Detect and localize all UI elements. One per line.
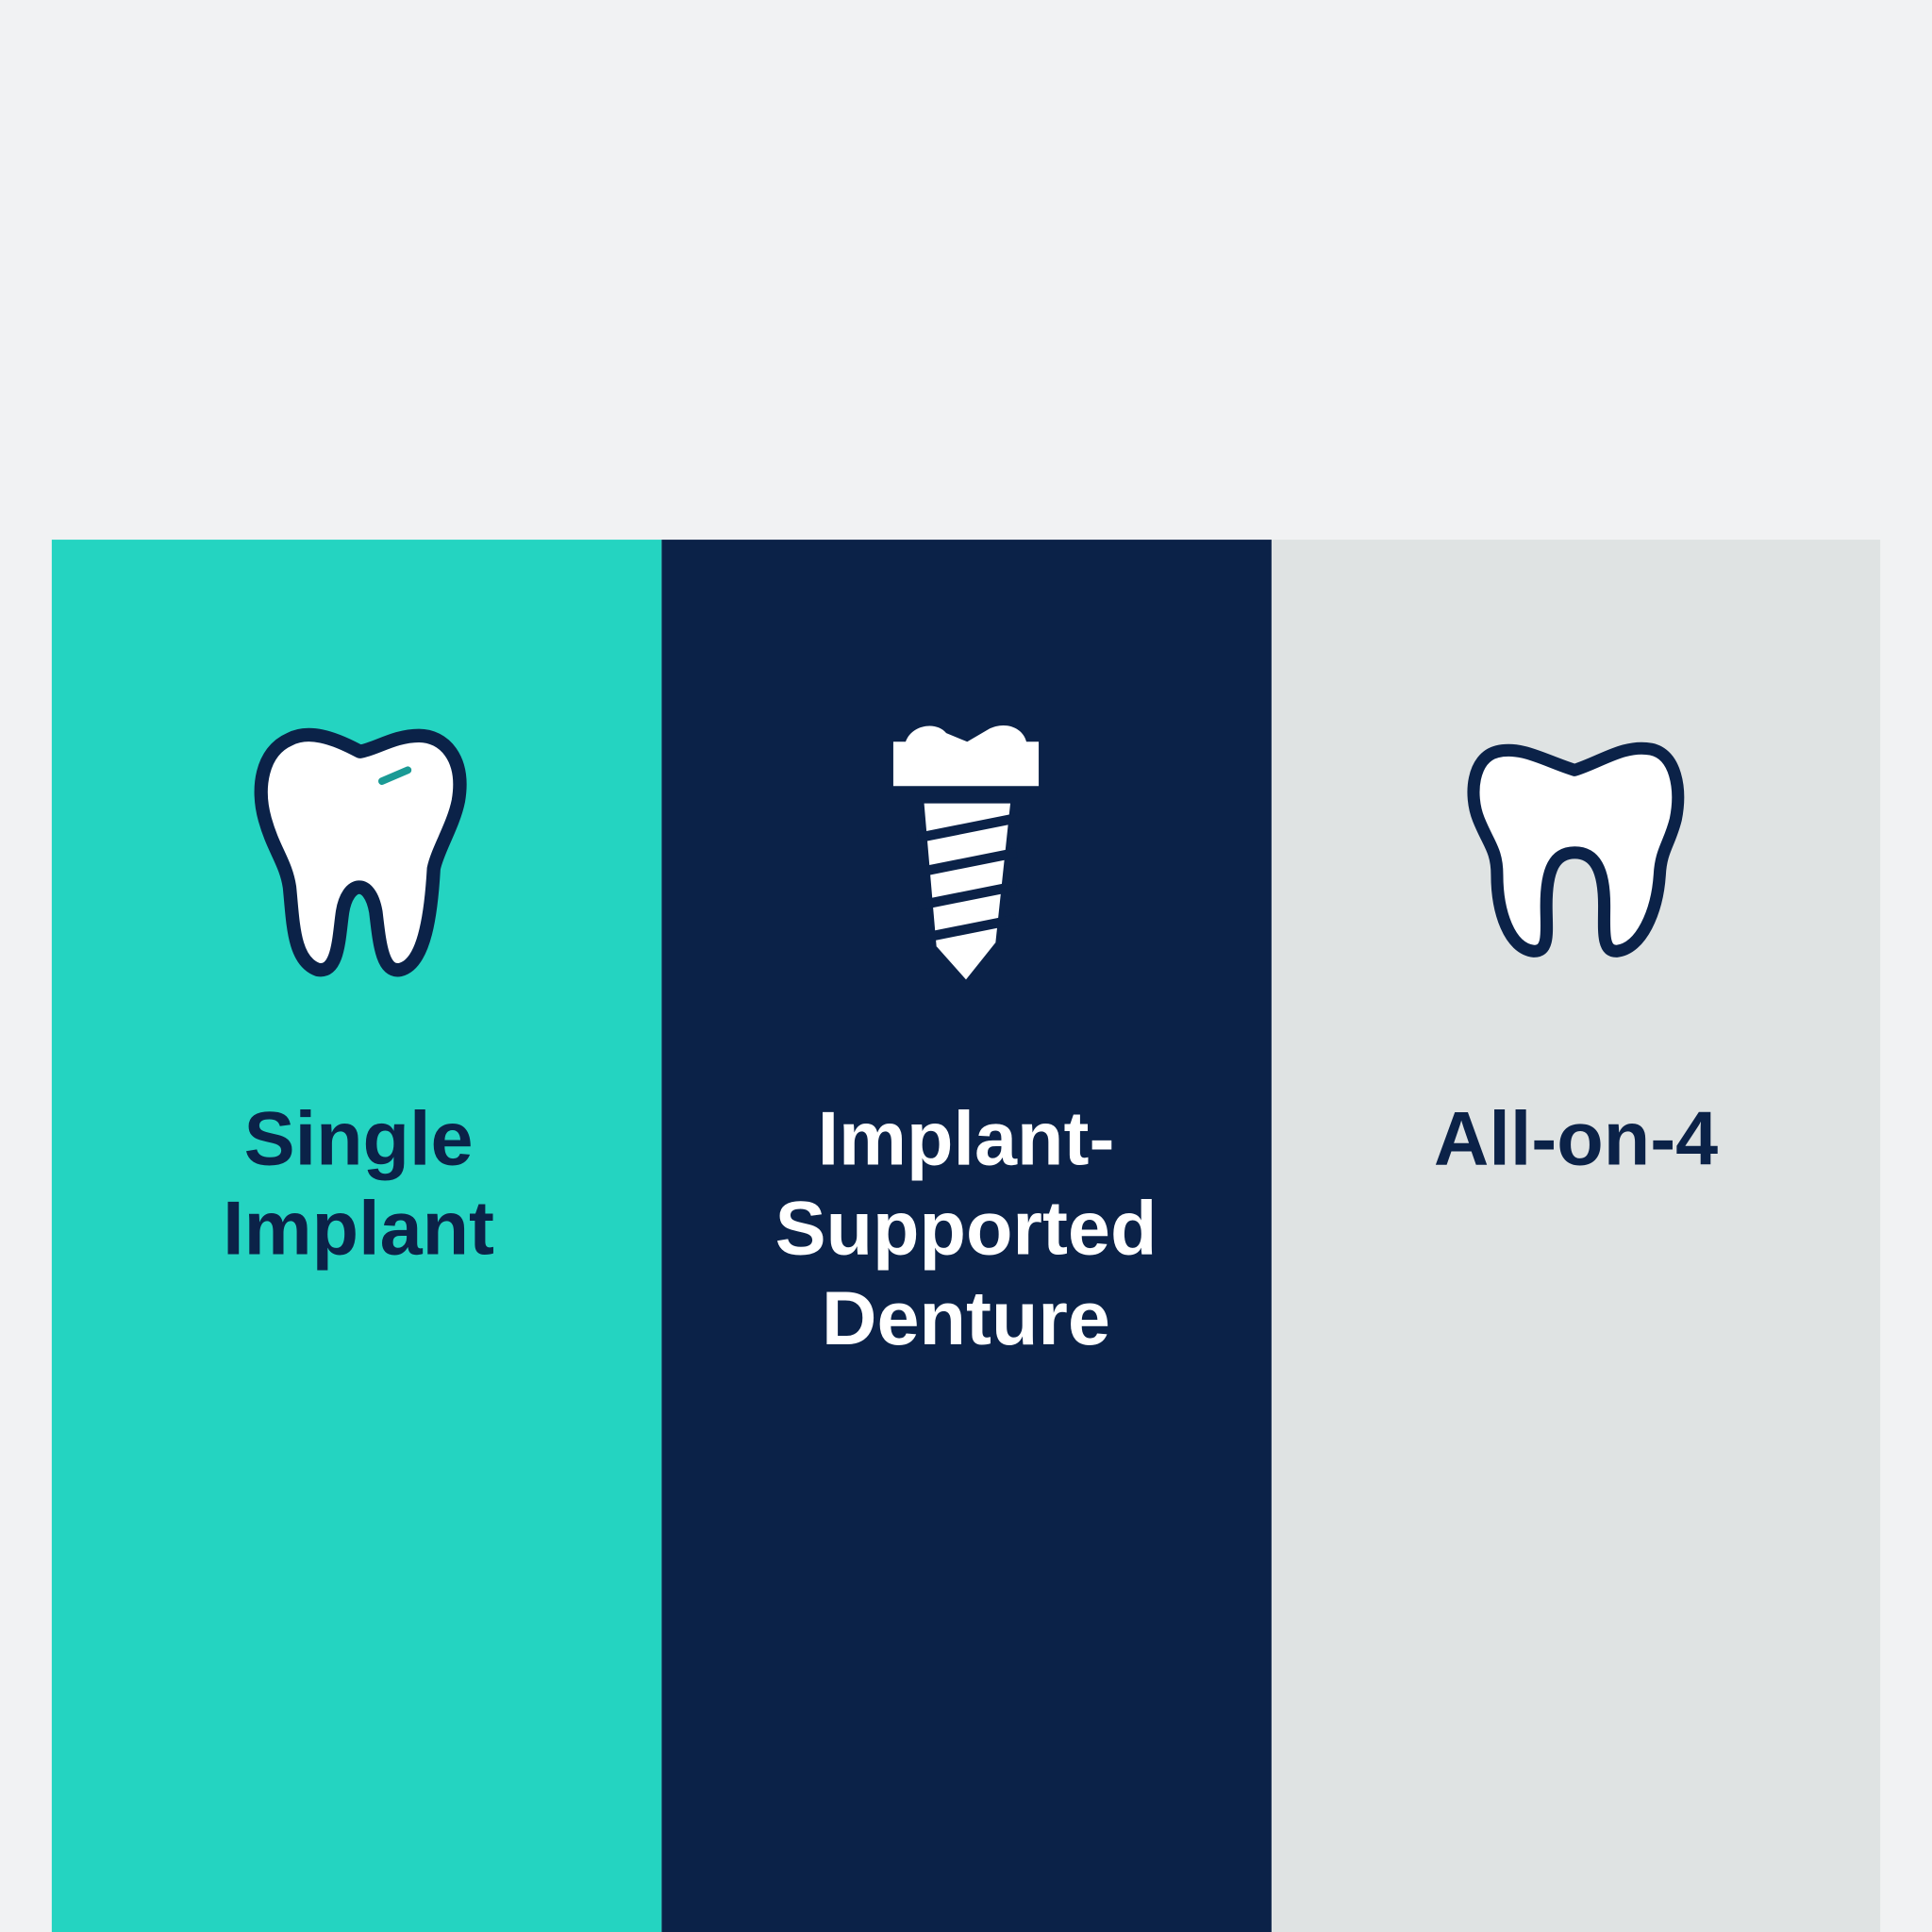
heading: Single Implant: Single: [244, 1096, 474, 1181]
panel: all-on-4: [1272, 540, 1880, 1932]
icon: tooth outline: [1474, 748, 1678, 951]
panel: implant-supported denture: Supported: [775, 1187, 1157, 1272]
panel: single implant: Implant: [223, 1187, 494, 1272]
heading: All-on-4: All-on-4: [1434, 1096, 1718, 1181]
panel: implant-supported denture: [661, 540, 1272, 1932]
icon: tooth: [261, 735, 459, 970]
icon: dental implant: [893, 725, 1039, 979]
heading: Implant-Supported Denture: Implant-: [818, 1096, 1114, 1181]
panel: single implant: [52, 540, 661, 1932]
panel: implant-supported denture: Denture: [822, 1276, 1110, 1361]
